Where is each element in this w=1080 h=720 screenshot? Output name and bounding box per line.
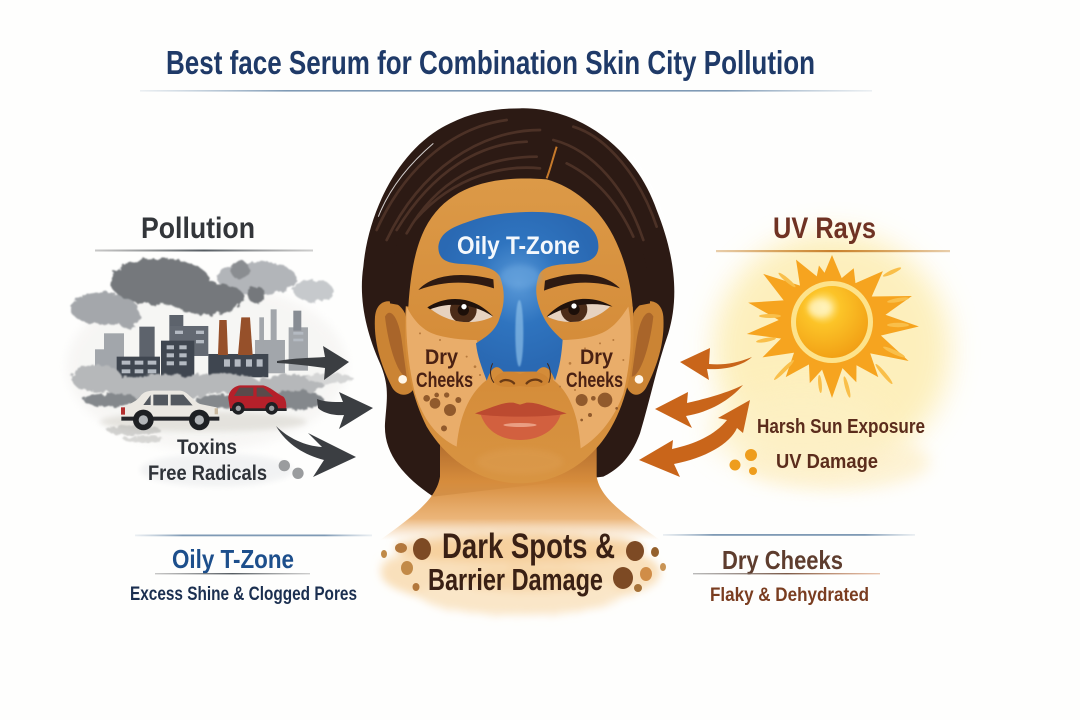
cheek spots (419, 332, 624, 431)
face skin (405, 173, 634, 483)
callout: oily t-zone: Excess Shine & Clogged Pores (130, 584, 357, 605)
eyebrows (418, 274, 620, 291)
eye: left (427, 299, 494, 322)
ground haze (100, 412, 307, 432)
icon: sun (745, 253, 920, 398)
label: sun exposure and uv damage: Harsh Sun Exposure (757, 416, 925, 438)
callout: oily t-zone (130, 534, 372, 605)
label: dry cheeks right (566, 346, 623, 392)
ear: left (375, 301, 415, 395)
toxin particles (279, 460, 304, 479)
lips (475, 403, 567, 440)
icon: uv particles (730, 449, 757, 475)
label: sun exposure and uv damage: UV Damage (776, 451, 878, 473)
earring: left (398, 375, 407, 384)
label: oily t-zone on forehead: Oily T-Zone (457, 232, 580, 260)
dark spots (381, 538, 666, 592)
dry cheek: right (553, 307, 631, 448)
label: dry cheeks left: Dry (425, 346, 458, 369)
buildings (95, 309, 308, 380)
label: dry cheeks left (416, 346, 473, 392)
hair (362, 108, 674, 497)
skin splash (380, 532, 660, 615)
illustration: city smog and cars (67, 258, 353, 487)
label: toxins and free radicals: Toxins (177, 436, 237, 459)
smoke clouds (70, 258, 333, 328)
windows (122, 331, 303, 373)
splash text (428, 527, 615, 597)
heading: uv rays: UV Rays (773, 212, 876, 245)
splash text: Barrier Damage (428, 562, 603, 597)
neck (380, 433, 660, 540)
panel: pollution (67, 212, 373, 487)
white car (121, 391, 219, 430)
panel: uv rays (639, 212, 950, 490)
ear: right (627, 301, 664, 395)
callout: dry cheeks: Flaky & Dehydrated (710, 585, 869, 606)
callout: oily t-zone: Oily T-Zone (172, 544, 294, 574)
nose (491, 363, 550, 387)
chimneys (218, 320, 228, 355)
red car (228, 385, 287, 415)
title: Best face Serum for Combination Skin City Pollution (166, 44, 815, 81)
ground smog (72, 364, 353, 409)
face illustration (362, 108, 674, 540)
sun glow background (710, 232, 950, 490)
splash text: Dark Spots & (442, 527, 615, 566)
label: sun exposure and uv damage (757, 416, 925, 473)
bottom splash: dark spots and barrier damage (380, 527, 666, 615)
label: toxins and free radicals: Free Radicals (148, 462, 267, 485)
chin highlight (477, 448, 563, 475)
arrows: uv to face (639, 348, 752, 477)
heading: pollution: Pollution (141, 212, 255, 245)
arrows: pollution to face (276, 346, 373, 477)
label: toxins and free radicals (148, 436, 267, 485)
earring: right (635, 375, 643, 384)
oily t-zone (438, 212, 598, 381)
label: dry cheeks right: Cheeks (566, 369, 623, 392)
callout: dry cheeks: Dry Cheeks (722, 545, 843, 575)
label: dry cheeks right: Dry (580, 346, 613, 369)
callout: dry cheeks (663, 534, 915, 606)
hair over forehead (377, 120, 657, 307)
eye: right (546, 298, 612, 322)
dry cheek: left (406, 307, 487, 447)
label: dry cheeks left: Cheeks (416, 369, 473, 392)
